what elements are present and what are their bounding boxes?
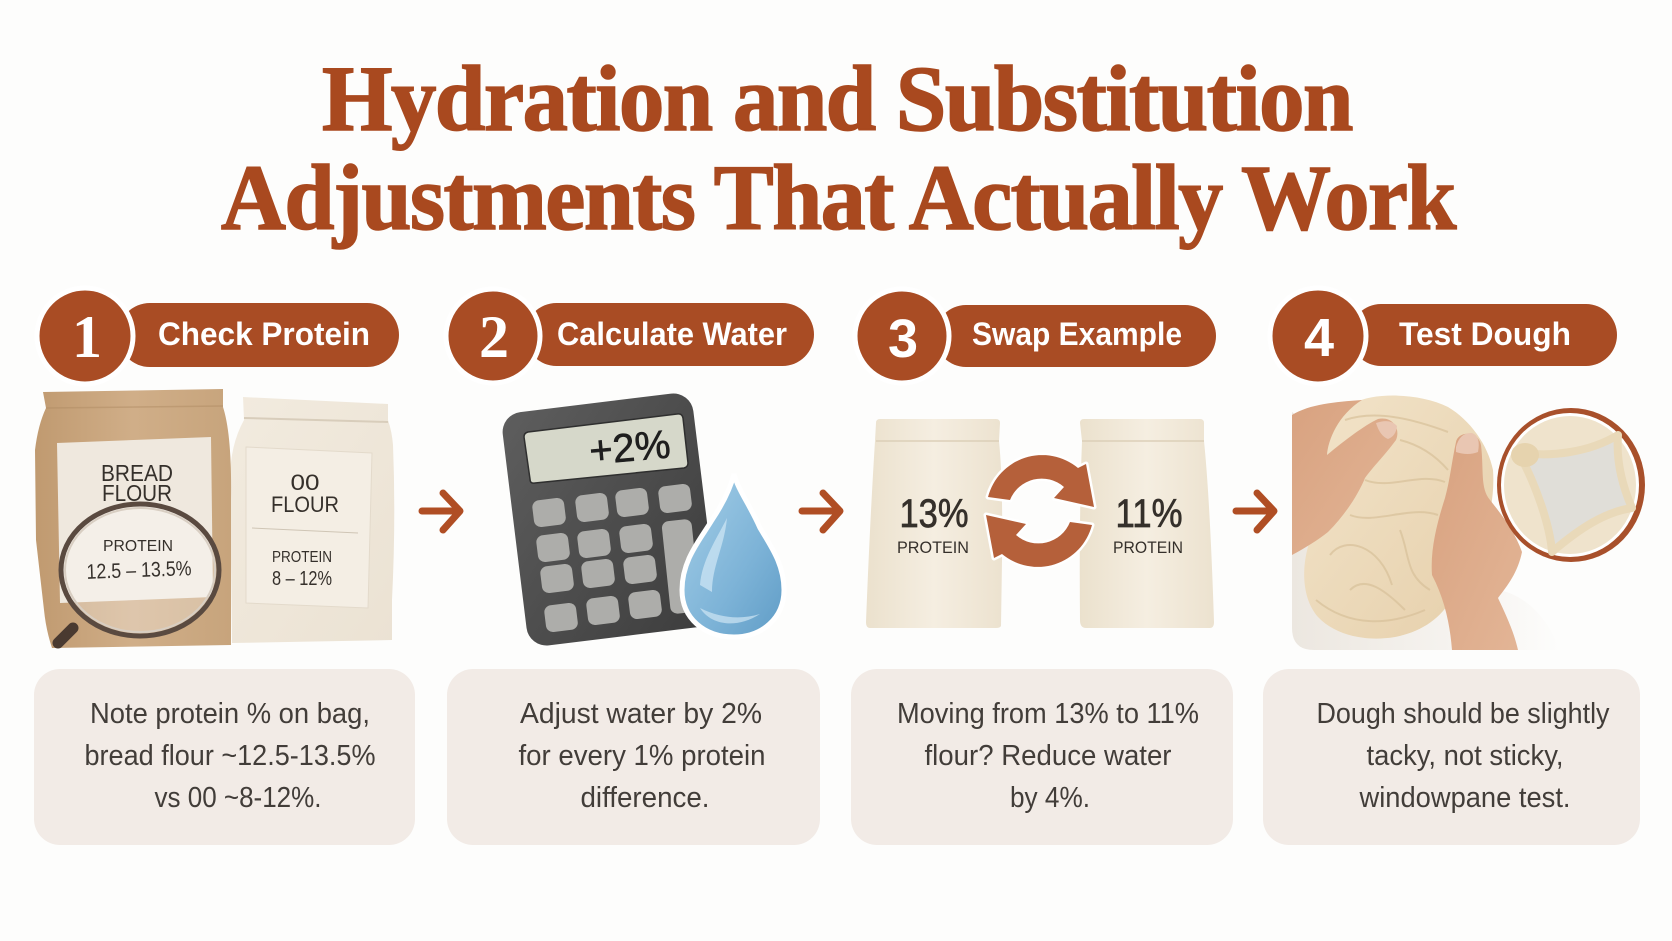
card: step 2 text: for every 1% protein <box>518 740 766 772</box>
step 1 header: Check Protein <box>37 288 399 384</box>
bag: 00 flour: 00 <box>290 470 320 495</box>
step 1 header: Check Protein: 1 <box>72 304 102 370</box>
magnifier: 12.5 – 13.5% <box>86 557 192 584</box>
swap arrows <box>986 455 1094 567</box>
bag: 11% protein: 11% <box>1116 492 1182 536</box>
card: step 1 text <box>34 669 415 845</box>
water drop <box>682 474 784 637</box>
panel backdrop <box>1292 412 1560 650</box>
bag: 00 flour: 8 – 12% <box>272 568 332 590</box>
calculator display: +2% <box>587 423 672 473</box>
card: step 1 text: bread flour ~12.5-13.5% <box>84 740 376 772</box>
right hand <box>1432 433 1522 650</box>
calculator display <box>524 414 688 483</box>
card: step 4 text: tacky, not sticky, <box>1366 740 1564 772</box>
card: step 4 text: Dough should be slightly <box>1316 698 1610 730</box>
step 4 header: Test Dough <box>1270 288 1617 384</box>
card: step 4 text <box>1263 669 1640 845</box>
dough ball <box>1304 396 1493 639</box>
bag: 00 flour <box>230 397 394 643</box>
bag: bread flour <box>35 389 231 648</box>
card: step 2 text: difference. <box>580 782 710 814</box>
card: step 3 text: flour? Reduce water <box>924 740 1172 772</box>
windowpane inset <box>1497 408 1645 562</box>
step 3 header: Swap Example: 3 <box>888 309 918 369</box>
card: step 1 text: vs 00 ~8-12%. <box>154 782 322 814</box>
step 3 header: Swap Example <box>855 289 1216 383</box>
step 2 header: Calculate Water: Calculate Water <box>557 316 787 352</box>
step 2 header: Calculate Water: 2 <box>479 304 509 370</box>
bag: 11% protein: PROTEIN <box>1113 538 1183 557</box>
illustration: swap bags <box>866 419 1214 628</box>
card: step 4 text: windowpane test. <box>1359 782 1570 814</box>
card: step 2 text <box>447 669 820 845</box>
title: Hydration and Substitution <box>322 48 1353 151</box>
bag: 11% protein <box>1080 419 1214 628</box>
illustration: flour bags with magnifier <box>35 389 394 648</box>
bag: 13% protein: 13% <box>900 492 968 536</box>
illustration: dough with hands and windowpane <box>1292 396 1645 650</box>
bag: 00 flour: FLOUR <box>271 492 339 517</box>
step 4 header: Test Dough: Test Dough <box>1399 316 1571 352</box>
title <box>221 48 1457 250</box>
arrow: step 2 to step 3 <box>802 493 840 530</box>
bag: 13% protein <box>866 419 1002 628</box>
calculator keys <box>532 483 701 633</box>
title: Adjustments That Actually Work <box>221 147 1457 250</box>
magnifier: PROTEIN <box>103 538 173 555</box>
arrow: step 1 to step 2 <box>422 493 460 530</box>
card: step 1 text: Note protein % on bag, <box>90 698 370 730</box>
card: step 3 text: Moving from 13% to 11% <box>897 698 1199 730</box>
card: step 3 text: by 4%. <box>1010 782 1090 814</box>
illustration: calculator with water drop <box>500 391 784 648</box>
dough folds <box>1316 416 1448 621</box>
step 2 header: Calculate Water <box>446 289 814 383</box>
step 4 header: Test Dough: 4 <box>1304 308 1334 368</box>
bag: 00 flour: PROTEIN <box>272 549 332 566</box>
bag: 13% protein: PROTEIN <box>897 538 969 557</box>
calculator body <box>500 391 720 648</box>
card: step 3 text <box>851 669 1233 845</box>
arrow: step 3 to step 4 <box>1236 493 1274 530</box>
bag: bread flour: FLOUR <box>102 480 172 506</box>
card: step 2 text: Adjust water by 2% <box>520 698 762 730</box>
bag: bread flour: BREAD <box>101 460 173 486</box>
magnifier <box>58 504 219 643</box>
step 3 header: Swap Example: Swap Example <box>972 316 1182 352</box>
step 1 header: Check Protein: Check Protein <box>158 316 370 352</box>
left hand <box>1292 400 1397 555</box>
